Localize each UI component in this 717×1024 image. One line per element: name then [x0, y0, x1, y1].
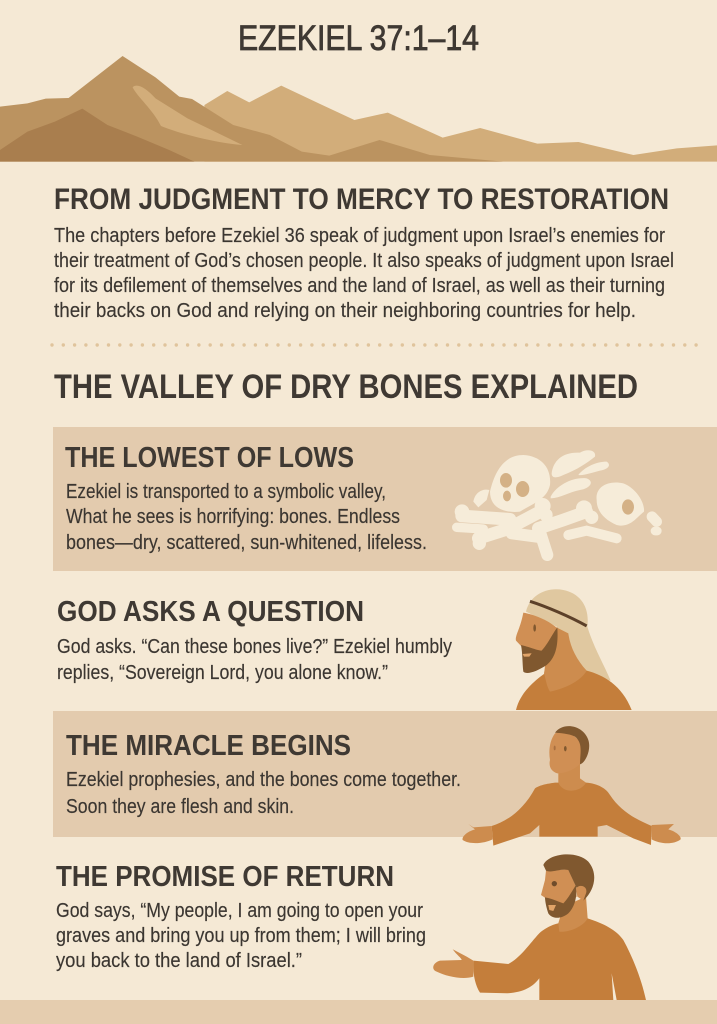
- heading: the miracle begins: THE MIRACLE BEGINS: [66, 730, 351, 762]
- text: the miracle begins: Soon they are flesh and skin.: [66, 796, 294, 818]
- text: the promise of return: God says, “My people, I am going to open your: [56, 900, 423, 922]
- footer band: [0, 1000, 717, 1024]
- text: lowest of lows: Ezekiel is transported to a symbolic valley,: [66, 481, 386, 503]
- text: the promise of return: you back to the land of Israel.”: [56, 950, 302, 972]
- text: god asks a question: God asks. “Can these bones live?” Ezekiel humbly: [57, 636, 452, 658]
- text: the promise of return: graves and bring you up from them; I will bring: [56, 925, 426, 947]
- figure: bearded man gesturing: [433, 854, 646, 1000]
- text: god asks a question: [57, 636, 452, 684]
- intro paragraph: The chapters before Ezekiel 36 speak of judgment upon Israel’s enemies for: [54, 225, 665, 247]
- heading: the lowest of lows: THE LOWEST OF LOWS: [65, 442, 354, 474]
- intro paragraph: [54, 225, 674, 322]
- panel: the miracle begins: [53, 711, 717, 837]
- figure: man with outstretched arms: [463, 726, 681, 846]
- panel: the lowest of lows: [53, 427, 717, 571]
- intro paragraph: their backs on God and relying on their neighboring countries for help.: [54, 300, 636, 322]
- text: the miracle begins: [66, 769, 461, 818]
- text: god asks a question: replies, “Sovereign Lord, you alone know.”: [57, 662, 388, 684]
- text: lowest of lows: What he sees is horrifying: bones. Endless: [66, 506, 400, 528]
- section heading: valley of dry bones: THE VALLEY OF DRY BONES EXPLAINED: [54, 368, 638, 406]
- text: the promise of return: [56, 900, 426, 972]
- text: the miracle begins: Ezekiel prophesies, and the bones come together.: [66, 769, 461, 791]
- figure: prophet with headcloth in profile: [516, 589, 632, 710]
- intro paragraph: for its defilement of themselves and the land of Israel, as well as their turning: [54, 275, 665, 297]
- text: lowest of lows: [66, 481, 427, 554]
- icon: pile of skulls and bones: [455, 450, 657, 555]
- illustration: desert mountains: [0, 56, 717, 162]
- heading: god asks a question: GOD ASKS A QUESTION: [57, 596, 364, 628]
- text: lowest of lows: bones—dry, scattered, sun-whitened, lifeless.: [66, 532, 427, 554]
- heading: the promise of return: THE PROMISE OF RETURN: [56, 861, 394, 893]
- title: EZEKIEL 37:1–14: [238, 19, 479, 58]
